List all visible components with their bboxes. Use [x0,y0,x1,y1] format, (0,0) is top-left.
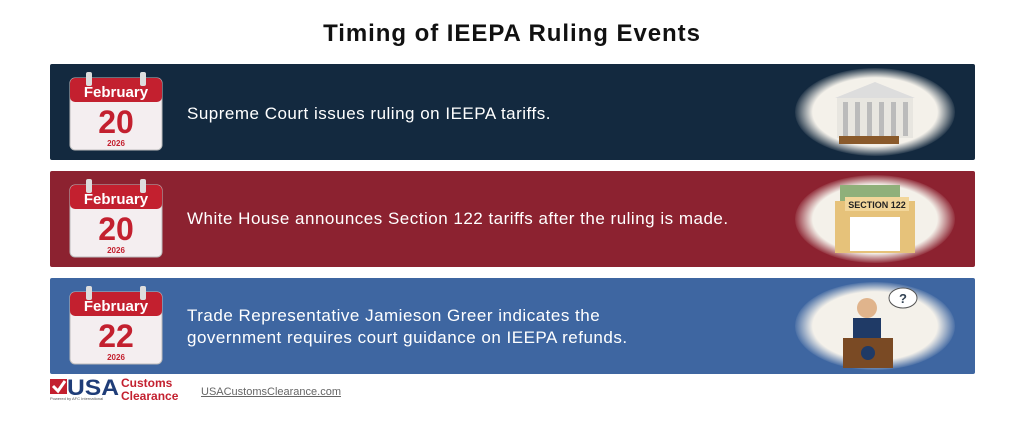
text: event 1: Supreme Court issues ruling on IEEPA tariffs. [187,104,551,123]
text: event 3: government requires court guidance on IEEPA refunds. [187,328,628,347]
icon: calendar feb 20: February [84,84,149,101]
text: event 3 [187,306,628,347]
panel: white house [50,171,975,267]
icon: calendar feb 20 [70,179,162,258]
logo: Customs [121,376,173,390]
icon: calendar feb 22 [70,286,162,364]
title: Timing of IEEPA Ruling Events [323,20,701,47]
icon: calendar feb 22: 2026 [107,353,125,362]
footer link: USACustomsClearance.com [201,386,341,398]
text: event 3: Trade Representative Jamieson Greer indicates the [187,306,600,325]
icon: speaker at podium: ? [899,291,907,306]
logo [50,376,179,402]
icon: calendar feb 22: February [84,298,149,315]
icon: calendar feb 22: 22 [98,318,134,354]
icon: calendar feb 20: 2026 [107,246,125,255]
logo: Powered by AFC International [50,396,103,401]
icon: calendar feb 20: February [84,191,149,208]
icon: calendar feb 20 [70,72,162,150]
icon: section 122 folder: SECTION 122 [848,200,906,210]
icon: speaker at podium [795,282,955,370]
panel: trade rep [50,278,975,374]
panel: supreme court [50,64,975,160]
icon: calendar feb 20: 20 [98,104,134,140]
icon: calendar feb 20: 20 [98,211,134,247]
text: event 2: White House announces Section 122 tariffs after the ruling is made. [187,209,729,228]
icon: courthouse [795,68,955,156]
icon: section 122 folder [795,175,955,263]
icon: calendar feb 20: 2026 [107,139,125,148]
